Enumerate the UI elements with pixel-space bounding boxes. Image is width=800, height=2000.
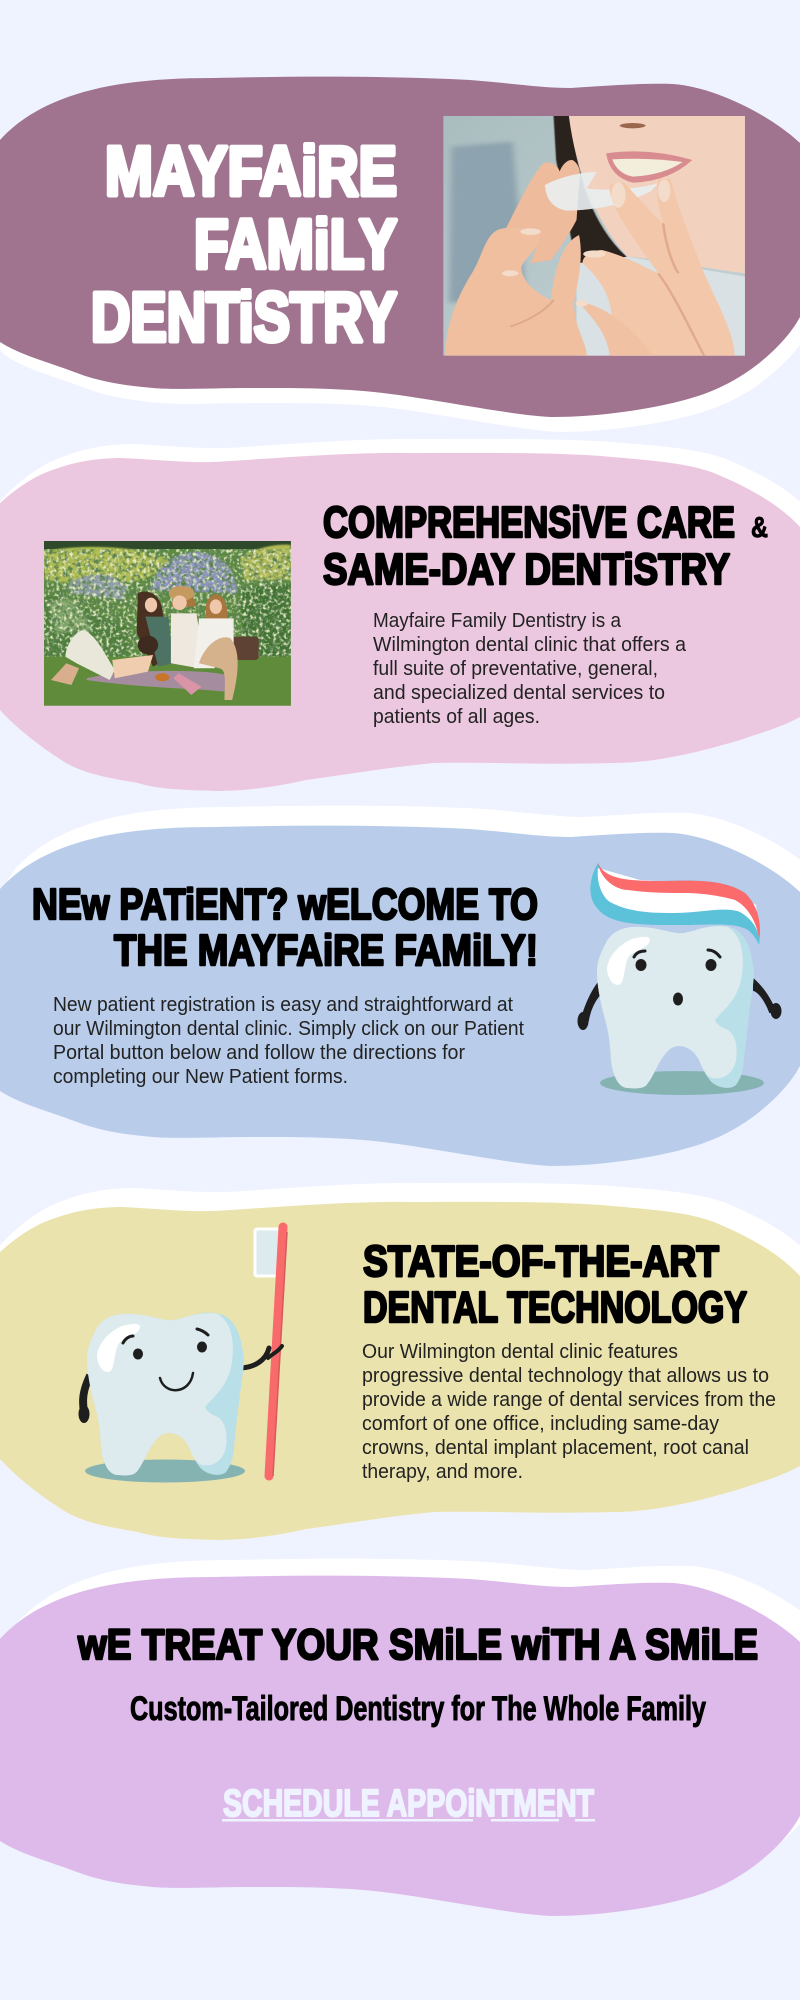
title: MAYFAiRE: [105, 132, 397, 210]
body text: and specialized dental services to: [373, 681, 665, 704]
body text: crowns, dental implant placement, root canal: [362, 1436, 749, 1459]
body text: Wilmington dental clinic that offers a: [373, 633, 687, 656]
body text: [53, 993, 524, 1088]
body text: patients of all ages.: [373, 705, 540, 728]
body text: Portal button below and follow the directions for: [53, 1041, 465, 1064]
heading: [363, 1237, 747, 1332]
body text: provide a wide range of dental services from the: [362, 1388, 776, 1411]
icon: surprised tooth with toothpaste: [578, 863, 782, 1095]
body text: progressive dental technology that allows us to: [362, 1364, 769, 1387]
link: schedule appointment: SCHEDULE APPOiNTMENT: [223, 1783, 594, 1825]
body text: our Wilmington dental clinic. Simply click on our Patient: [53, 1017, 524, 1040]
body text: [362, 1340, 776, 1483]
icon: smiling tooth holding a toothbrush: [78, 1227, 287, 1482]
heading: THE MAYFAiRE FAMiLY!: [114, 926, 538, 975]
heading: NEw PATiENT? wELCOME TO: [32, 880, 538, 929]
body text: Our Wilmington dental clinic features: [362, 1340, 678, 1363]
panel: header: [0, 77, 800, 432]
heading: STATE-OF-THE-ART: [363, 1237, 719, 1286]
body text: [373, 609, 687, 728]
title: DENTiSTRY: [91, 278, 397, 356]
panel: technology: [0, 1183, 800, 1540]
panel: new patient: [0, 806, 800, 1166]
photo: friends picnicking in a garden: [44, 541, 291, 706]
body text: completing our New Patient forms.: [53, 1065, 348, 1088]
heading: [323, 498, 768, 594]
heading: &: [751, 512, 768, 544]
body text: comfort of one office, including same-day: [362, 1412, 720, 1435]
photo: woman fitting a clear aligner: [443, 116, 745, 356]
body text: full suite of preventative, general,: [373, 657, 658, 680]
body text: Mayfaire Family Dentistry is a: [373, 609, 622, 632]
title: [91, 132, 397, 356]
title: FAMiLY: [194, 205, 397, 283]
body text: therapy, and more.: [362, 1460, 523, 1483]
panel: comprehensive care: [0, 439, 800, 791]
heading: [32, 880, 538, 975]
heading: SAME-DAY DENTiSTRY: [323, 545, 730, 594]
panel: call to action: [0, 1559, 800, 1916]
body text: New patient registration is easy and straightforward at: [53, 993, 513, 1016]
